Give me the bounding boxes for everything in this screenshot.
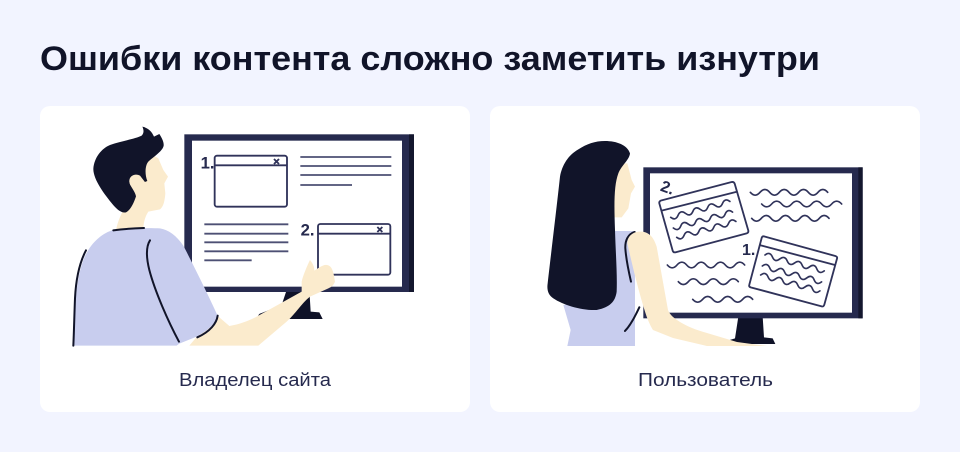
panel: site owner [40, 106, 470, 412]
wavy text bottom left [667, 262, 753, 302]
window 1 [201, 154, 287, 207]
arm [189, 260, 335, 346]
window 1: 1. [201, 154, 215, 173]
tilted window 1 [742, 236, 837, 306]
monitor stand [258, 290, 323, 319]
monitor: user [643, 167, 863, 344]
text lines bottom left [204, 224, 288, 260]
tilted window 2 [658, 178, 748, 252]
seams [625, 232, 639, 331]
monitor: owner [184, 134, 414, 319]
man figure [73, 127, 335, 346]
panel: user [490, 106, 920, 412]
title: Ошибки контента сложно заметить изнутри [40, 40, 820, 78]
tilted window 2: 2. [658, 178, 677, 199]
hair [547, 141, 630, 310]
caption: owner: Владелец сайта [179, 370, 332, 390]
neck and face [116, 152, 168, 230]
window 2: 2. [301, 220, 315, 239]
ear [129, 175, 146, 191]
tilted window 1: 1. [742, 242, 755, 259]
arm [627, 232, 767, 346]
woman figure [547, 141, 767, 346]
shirt seams [73, 228, 218, 346]
top [563, 231, 635, 346]
caption: user: Пользователь [638, 370, 773, 390]
monitor stand [717, 317, 775, 344]
face [607, 163, 635, 217]
text lines top right [300, 157, 391, 185]
hair [93, 127, 164, 213]
window 2 [301, 220, 390, 275]
shirt [73, 228, 217, 346]
wavy text top right [750, 189, 842, 221]
